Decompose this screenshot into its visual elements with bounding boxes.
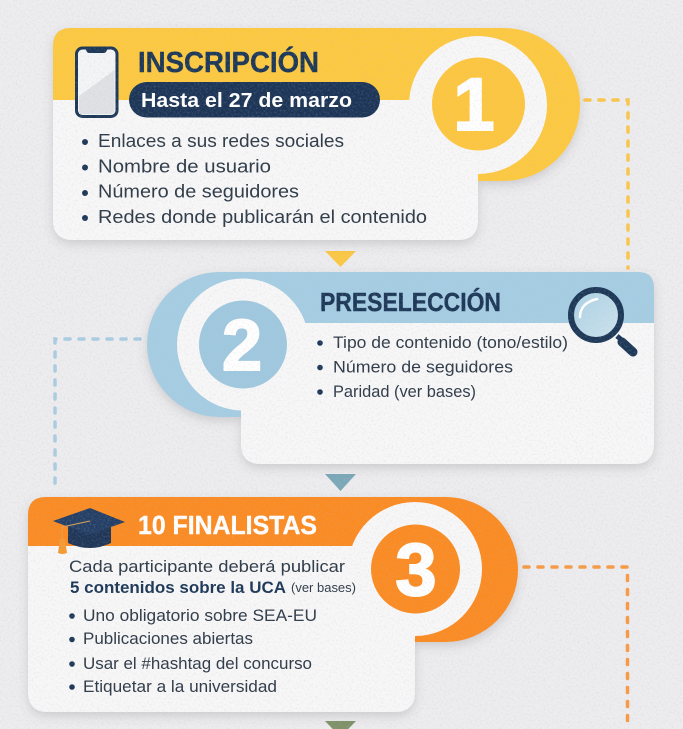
number badge 2 xyxy=(199,300,287,388)
panel: step 1 inscripción xyxy=(53,28,580,240)
heading: 10 FINALISTAS xyxy=(138,510,317,540)
arrow: step 3 onward xyxy=(325,721,356,729)
list of requirements: Número de seguidores xyxy=(98,180,299,202)
arrow: step 1 to 2 xyxy=(325,251,356,267)
heading: PRESELECCIÓN xyxy=(320,287,501,317)
panel: step 3 finalistas xyxy=(28,497,518,712)
card silhouette: yellow header, white card and number ring xyxy=(53,28,580,240)
list of content rules: Uno obligatorio sobre SEA-EU xyxy=(83,607,317,625)
number badge 1: 1 xyxy=(453,63,495,146)
list of criteria: Paridad (ver bases) xyxy=(333,383,476,401)
dashed connector: step 3 onward xyxy=(524,567,628,729)
dashed connector: step 1 to step 2 xyxy=(585,100,628,268)
number badge 2: 2 xyxy=(222,306,262,386)
intro text: (ver bases) xyxy=(291,580,356,595)
number badge 3: 3 xyxy=(395,528,437,611)
number badge 3 xyxy=(371,524,460,614)
list of criteria: Tipo de contenido (tono/estilo) xyxy=(333,334,568,352)
dashed connector: step 2 to step 3 xyxy=(55,339,140,490)
icon: graduation cap xyxy=(53,508,125,554)
date pill xyxy=(129,82,380,118)
intro text xyxy=(69,558,356,597)
list of content rules: Etiquetar a la universidad xyxy=(83,678,277,696)
list of requirements xyxy=(82,130,427,227)
icon: magnifying glass xyxy=(571,290,633,352)
heading: INSCRIPCIÓN xyxy=(138,45,319,79)
intro text: Cada participante deberá publicar xyxy=(69,558,346,576)
list of content rules xyxy=(69,607,317,696)
list of requirements: Nombre de usuario xyxy=(98,156,271,176)
arrow: step 2 to 3 xyxy=(325,474,356,491)
list of criteria xyxy=(317,334,568,401)
list of requirements: Redes donde publicarán el contenido xyxy=(98,206,427,227)
list of criteria: Número de seguidores xyxy=(333,358,513,376)
number badge 1 xyxy=(432,58,525,150)
list of requirements: Enlaces a sus redes sociales xyxy=(98,130,344,151)
icon: phone xyxy=(76,48,117,116)
list of content rules: Usar el #hashtag del concurso xyxy=(83,655,312,673)
card silhouette: orange header, white card and number ring xyxy=(28,497,518,712)
list of content rules: Publicaciones abiertas xyxy=(83,630,253,648)
card silhouette: blue header, white card and number ring xyxy=(147,272,654,464)
panel: step 2 preselección xyxy=(147,272,654,464)
intro text: 5 contenidos sobre la UCA xyxy=(70,579,286,597)
date pill: Hasta el 27 de marzo xyxy=(141,90,352,112)
